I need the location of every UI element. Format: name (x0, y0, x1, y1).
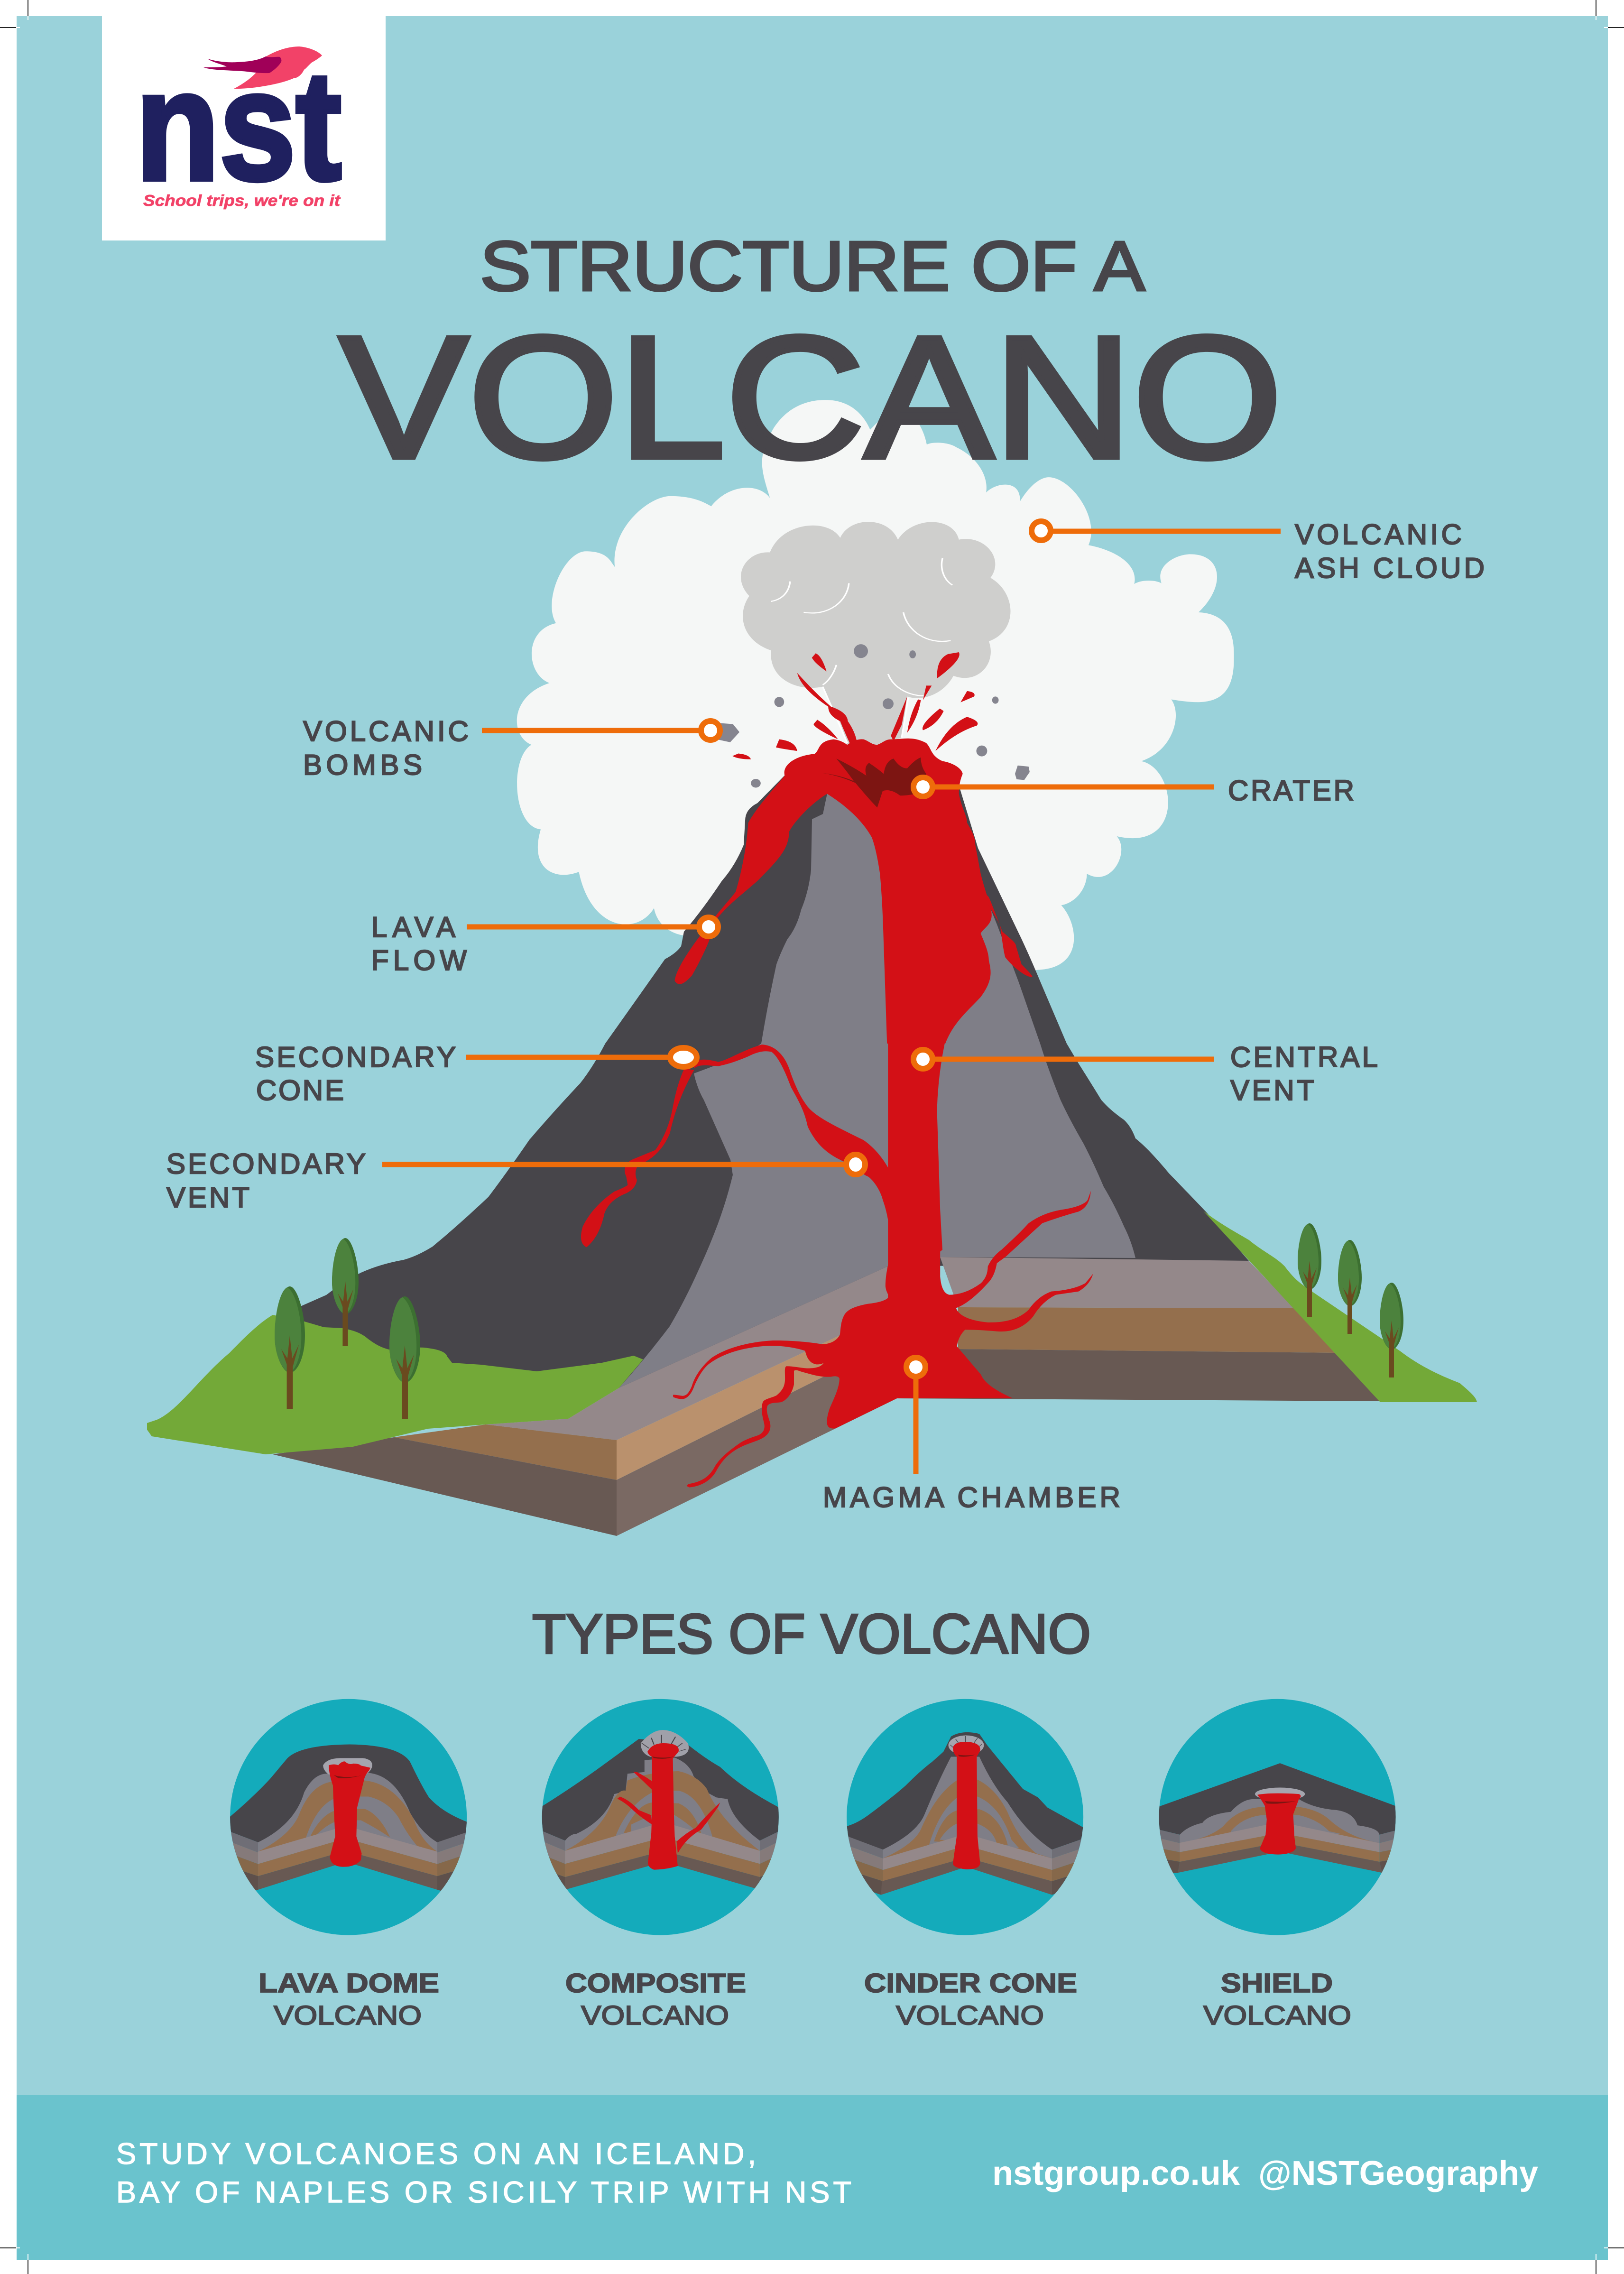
label: lava flow: FLOW (371, 944, 467, 976)
trees right (1298, 1223, 1403, 1377)
volcanic rocks (717, 644, 1030, 787)
footer website: nstgroup.co.uk (992, 2154, 1240, 2192)
heading: types of volcano: TYPES OF VOLCANO (532, 1603, 1091, 1665)
volcano inner cross-section (619, 794, 1135, 1388)
label: volcanic bombs: VOLCANIC (303, 715, 469, 747)
label: secondary cone (255, 1041, 697, 1106)
footer call to action (116, 2137, 851, 2209)
tree 4 (1298, 1223, 1321, 1317)
label: secondary vent: SECONDARY (166, 1148, 366, 1180)
circle: cinder cone volcano (843, 1699, 1087, 1935)
tree 5 (1338, 1240, 1362, 1334)
caption: lava dome volcano (258, 1968, 439, 2031)
volcano silhouette (294, 776, 1249, 1388)
label: secondary cone: CONE (256, 1074, 344, 1106)
caption: shield volcano: SHIELD (1221, 1968, 1333, 1998)
label: lava flow (371, 911, 718, 976)
caption: cinder cone volcano (864, 1968, 1077, 2031)
logo wordmark: nst (136, 38, 341, 213)
ground block: left side (273, 1266, 901, 1536)
label: volcanic ash cloud: ASH CLOUD (1295, 552, 1485, 584)
logo bird (203, 46, 322, 89)
caption: shield volcano: VOLCANO (1203, 2000, 1351, 2031)
label: central vent: VENT (1230, 1074, 1314, 1106)
label: lava flow: LAVA (371, 911, 455, 943)
ground block: right side (897, 1257, 1380, 1401)
label: central vent: CENTRAL (1230, 1041, 1378, 1073)
caption: lava dome volcano: VOLCANO (274, 2000, 422, 2031)
ash cloud (517, 400, 1234, 982)
circle: lava dome volcano (225, 1699, 474, 1935)
tree 6 (1380, 1283, 1403, 1377)
label: secondary vent: VENT (166, 1182, 249, 1213)
label: magma chamber: MAGMA CHAMBER (823, 1481, 1120, 1513)
label: magma chamber (823, 1358, 1120, 1513)
secondary vent and descending lava (581, 1045, 901, 1257)
logo panel (102, 16, 386, 240)
tree 2 (332, 1238, 359, 1346)
label: central vent (914, 1041, 1378, 1106)
right grass (1203, 1211, 1477, 1402)
trees left (275, 1238, 420, 1419)
label: crater (914, 775, 1354, 806)
footer call to action: BAY OF NAPLES OR SICILY TRIP WITH NST (116, 2176, 851, 2209)
label: secondary cone: SECONDARY (255, 1041, 456, 1073)
label: volcanic ash cloud (1032, 518, 1485, 584)
caption: shield volcano (1203, 1968, 1351, 2031)
caption: composite volcano: VOLCANO (581, 2000, 729, 2031)
logo tagline: School trips, we're on it (143, 192, 341, 209)
crater (823, 758, 926, 808)
footer call to action: STUDY VOLCANOES ON AN ICELAND, (116, 2137, 756, 2171)
central vent and right magma arms (887, 1044, 1093, 1398)
tree 3 (389, 1296, 420, 1419)
title line 2: VOLCANO (340, 300, 1283, 494)
caption: lava dome volcano: LAVA DOME (258, 1968, 439, 1998)
circle: shield volcano (1155, 1699, 1399, 1935)
caption: cinder cone volcano: VOLCANO (896, 2000, 1044, 2031)
label: secondary vent (166, 1148, 865, 1213)
lava flow from crater (674, 739, 1033, 1044)
label: volcanic ash cloud: VOLCANIC (1295, 518, 1462, 550)
label: crater: CRATER (1228, 775, 1354, 806)
footer band (17, 2095, 1608, 2260)
caption: composite volcano: COMPOSITE (565, 1968, 746, 1998)
caption: cinder cone volcano: CINDER CONE (864, 1968, 1077, 1998)
magma chamber and left magma arms (673, 1252, 930, 1488)
tree 1 (275, 1286, 305, 1409)
left grass (147, 1315, 643, 1454)
label: volcanic bombs: BOMBS (303, 749, 422, 781)
label: volcanic bombs (303, 715, 720, 781)
circle: composite volcano (539, 1699, 783, 1935)
caption: composite volcano (565, 1968, 746, 2031)
title line 1: STRUCTURE OF A (480, 227, 1145, 305)
lava spatter (732, 652, 978, 759)
footer social handle: @NSTGeography (1258, 2154, 1538, 2192)
grey eruption smoke (741, 522, 1010, 745)
